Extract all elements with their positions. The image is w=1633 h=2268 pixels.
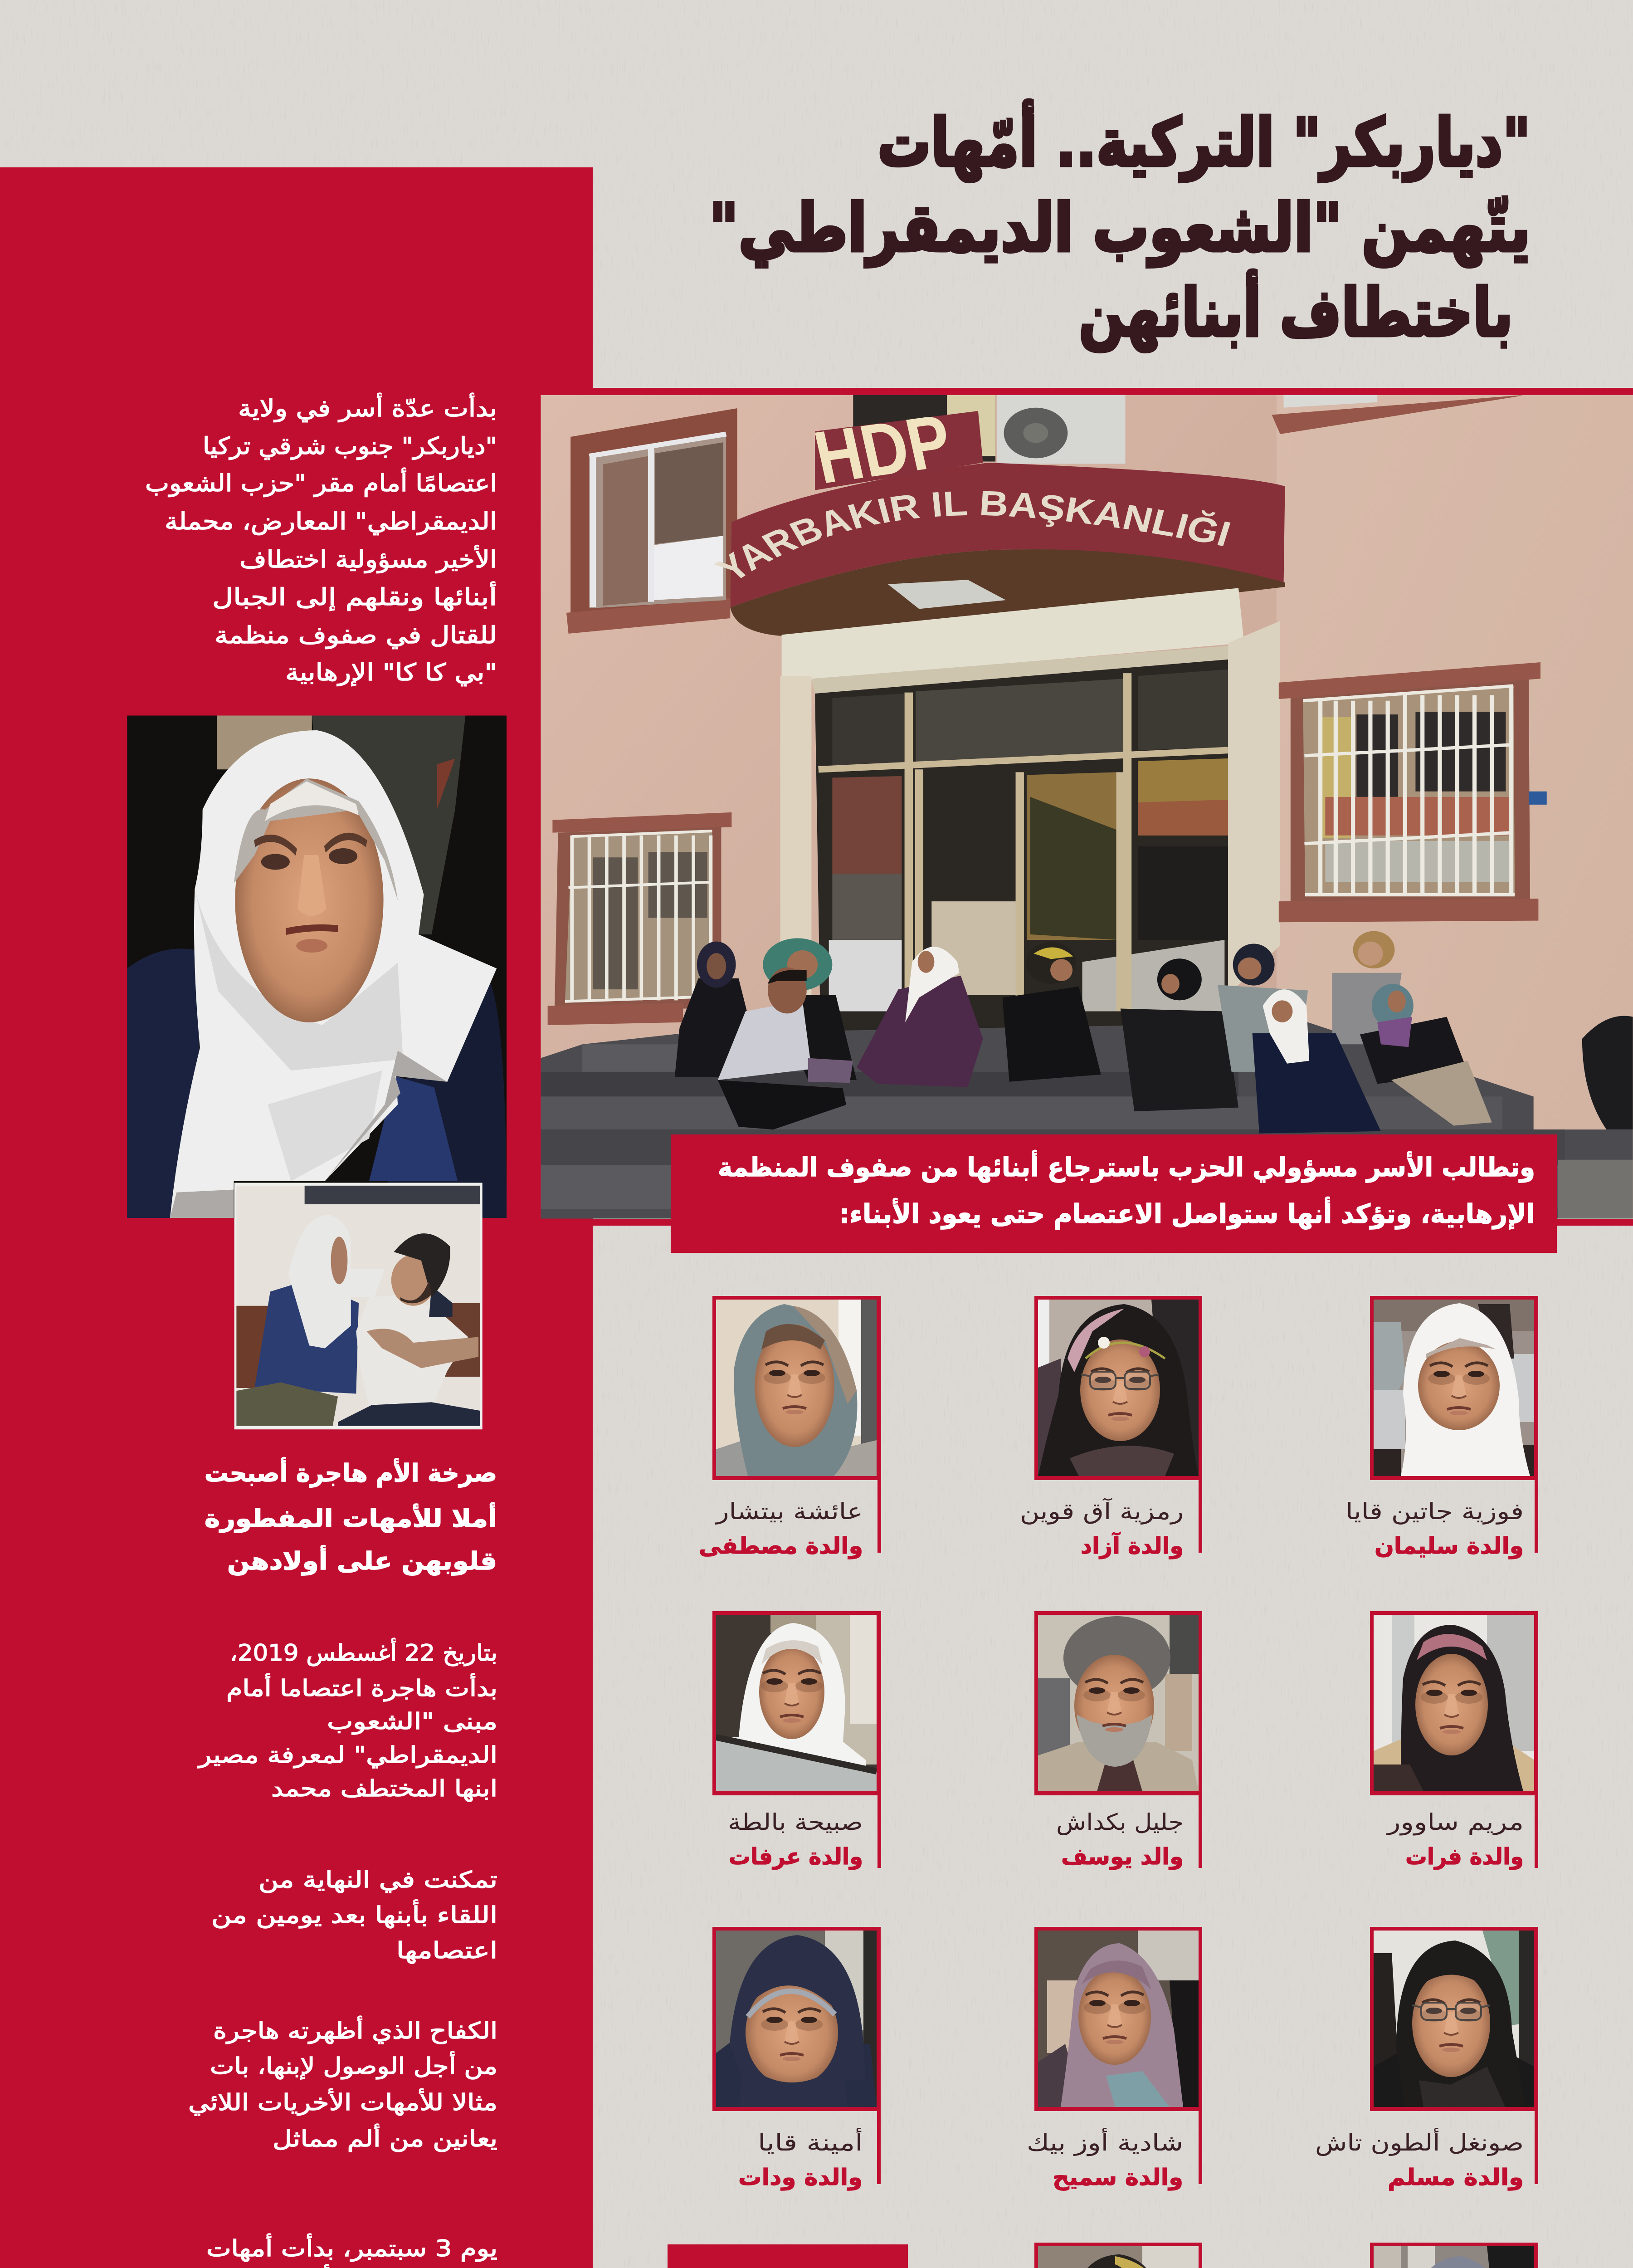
paragraph: struggle: مثالا للأمهات الأخريات اللائي	[188, 2088, 497, 2116]
paragraph: 3 September: يوم 3 سبتمبر، بدأت أمهات	[206, 2234, 497, 2262]
paragraph: reunion	[211, 1867, 497, 1964]
main photo: HDP building with mothers on the steps	[541, 390, 1633, 1252]
paragraph: 22 August: بتاريخ 22 أغسطس 2019،	[230, 1638, 497, 1667]
awning: YARBAKIR IL BAŞKANLIĞI	[707, 483, 1235, 589]
card: Emine Kaya	[712, 1927, 881, 2184]
name: Remziye	[1020, 1498, 1184, 1559]
upper windows	[853, 395, 995, 462]
seated people	[675, 931, 1633, 1134]
name: Emine: والدة ودات	[738, 2164, 863, 2191]
name: Sadiye	[1027, 2128, 1183, 2191]
name: Songul: صونغل ألطون تاش	[1315, 2128, 1524, 2156]
title	[709, 99, 1531, 352]
intro text: للقتال في صفوف منظمة	[214, 622, 497, 649]
heading: Hacire: صرخة الأم هاجرة أصبحت	[205, 1457, 497, 1487]
name: Remziye: والدة آزاد	[1081, 1532, 1184, 1559]
card: Sabiha Balta	[712, 1611, 881, 1868]
shutter box	[782, 588, 1244, 680]
caption box	[671, 1134, 1557, 1253]
name: Fevziye: فوزية جاتين قايا	[1345, 1498, 1524, 1525]
paragraph: struggle	[188, 2016, 497, 2152]
heading: Hacire: قلوبهن على أولادهن	[227, 1545, 497, 1575]
heading: Hacire: أملا للأمهات المفطورة	[205, 1502, 497, 1533]
name: Meryem	[1385, 1809, 1524, 1870]
card: Aysel Koyun	[1034, 2243, 1202, 2268]
door and glass	[780, 621, 1280, 1061]
card: Rahime Oymaz	[1370, 2243, 1538, 2268]
name: Sabiha: والدة عرفات	[729, 1843, 863, 1870]
name: Aysel: والدة مصطفى	[699, 1533, 863, 1559]
title: باختطاف أبنائهن	[1079, 269, 1513, 352]
red side panel	[0, 167, 593, 2268]
paragraph: reunion: اللقاء بأبنها بعد يومين من	[211, 1899, 497, 1929]
paragraph: reunion: تمكنت في النهاية من	[258, 1867, 497, 1893]
window lower left	[548, 812, 731, 1025]
card: Meryem Savur	[1370, 1611, 1538, 1868]
window right	[1279, 662, 1547, 922]
name: Meryem: مريم ساوور	[1385, 1809, 1524, 1836]
hdp sign: HDP	[807, 399, 959, 499]
name: Sadiye: والدة سميح	[1053, 2164, 1183, 2191]
intro text	[145, 393, 497, 686]
name: Fevziye	[1345, 1498, 1524, 1559]
name: Aysel: عائشة بيتشار	[714, 1498, 863, 1525]
name: Celil: جليل بكداش	[1056, 1809, 1184, 1835]
paragraph: 22 August: الديمقراطي" لمعرفة مصير	[197, 1742, 497, 1768]
name: Songul	[1315, 2128, 1524, 2191]
paragraph: struggle: من أجل الوصول لإبنها، بات	[210, 2051, 497, 2080]
large portrait: mother Hacire	[127, 716, 507, 1218]
intro text: "بي كا كا" الإرهابية	[285, 659, 497, 686]
card: Celil Bekdas	[1034, 1611, 1202, 1868]
name: Sabiha: صبيحة بالطة	[728, 1809, 863, 1835]
paragraph: 22 August: بدأت هاجرة اعتصاما أمام	[226, 1673, 497, 1701]
card: Fevziye Cetinkaya	[1370, 1296, 1538, 1553]
intro text: الديمقراطي" المعارض، محملة	[165, 508, 497, 535]
heading: Hacire	[205, 1457, 497, 1575]
steps	[541, 1022, 1633, 1252]
red band below photo	[593, 1219, 1633, 1226]
name: Celil: والد يوسف	[1061, 1843, 1184, 1870]
paragraph: 22 August	[197, 1638, 497, 1802]
awning	[707, 463, 1285, 636]
card: Remziye Akkoyun	[1034, 1296, 1202, 1553]
caption box: وتطالب الأسر مسؤولي الحزب باسترجاع أبنائها من صفوف المنظمة	[718, 1150, 1535, 1183]
window top left	[566, 408, 737, 634]
name: Remziye: رمزية آق قوين	[1020, 1498, 1184, 1525]
name: Songul: والدة مسلم	[1388, 2164, 1524, 2191]
name: Emine	[738, 2128, 863, 2191]
intro text: اعتصامًا أمام مقر "حزب الشعوب	[145, 468, 497, 497]
intro text: الأخير مسؤولية اختطاف	[239, 545, 497, 573]
card: Songul Altuntas	[1370, 1927, 1538, 2184]
paragraph: struggle: يعانين من ألم مماثل	[273, 2124, 497, 2152]
intro text: أبنائها ونقلهم إلى الجبال	[212, 582, 497, 611]
paragraph: 22 August: مبنى "الشعوب	[327, 1708, 497, 1735]
paragraph: struggle: الكفاح الذي أظهرته هاجرة	[213, 2016, 497, 2044]
paragraph: reunion: اعتصامها	[396, 1937, 497, 1964]
name: Emine: أمينة قايا	[758, 2128, 863, 2156]
name: Celil	[1056, 1809, 1184, 1870]
small photo: mother with son	[234, 1183, 483, 1429]
name: Fevziye: والدة سليمان	[1375, 1533, 1524, 1559]
paragraph: 22 August: ابنها المختطف محمد	[271, 1775, 497, 1802]
red band under title	[593, 388, 1633, 395]
caption box: الإرهابية، وتؤكد أنها ستواصل الاعتصام حتى يعود الأبناء:	[839, 1197, 1535, 1230]
ac unit	[997, 395, 1125, 464]
callout: number of mothers rose to 11	[668, 2244, 908, 2268]
name: Sadiye: شادية أوز بيك	[1027, 2128, 1183, 2156]
card: Aysel Bitser	[712, 1296, 881, 1553]
intro text: بدأت عدّة أسر في ولاية	[238, 393, 497, 422]
intro text: "دياربكر" جنوب شرقي تركيا	[203, 433, 497, 460]
name: Sabiha	[728, 1809, 863, 1870]
name: Aysel	[699, 1498, 863, 1559]
card: Sadiye Ozbek	[1034, 1927, 1202, 2184]
name: Meryem: والدة فرات	[1405, 1843, 1524, 1870]
